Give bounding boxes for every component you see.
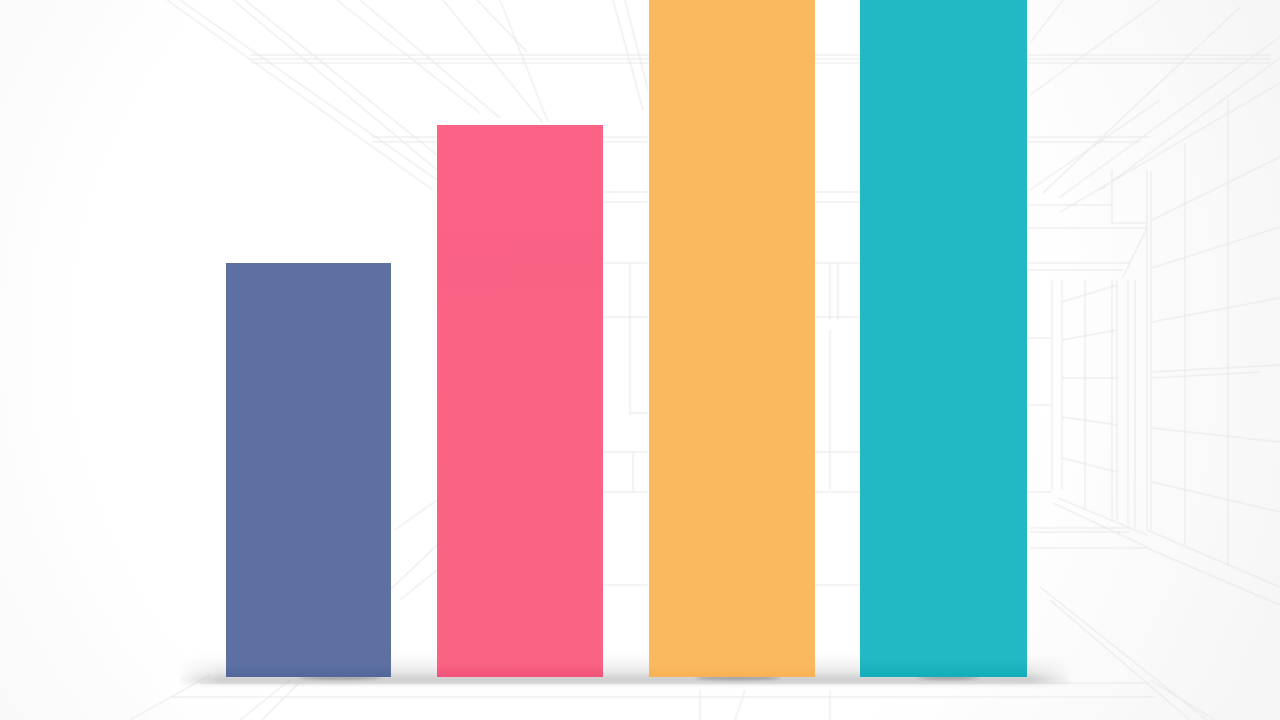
- bar 2: pink: [437, 125, 603, 677]
- centre wall rows: [604, 192, 860, 585]
- shadow under bars: [184, 662, 1066, 686]
- bar 3: orange: [649, 0, 815, 677]
- baseboards and floor: [1030, 498, 1280, 605]
- ceiling left perspective: [167, 0, 648, 190]
- bar chart: [226, 0, 1027, 677]
- far window: [1062, 280, 1135, 528]
- lower left and front floor: [130, 500, 1155, 720]
- bar 1: blue: [226, 263, 391, 677]
- contact shadows: [300, 676, 978, 680]
- far door: [1028, 170, 1147, 492]
- bar 4: teal: [860, 0, 1027, 677]
- right wall grid: [1147, 100, 1280, 565]
- ceiling beams: [250, 55, 1270, 142]
- ceiling right perspective: [1030, 0, 1280, 212]
